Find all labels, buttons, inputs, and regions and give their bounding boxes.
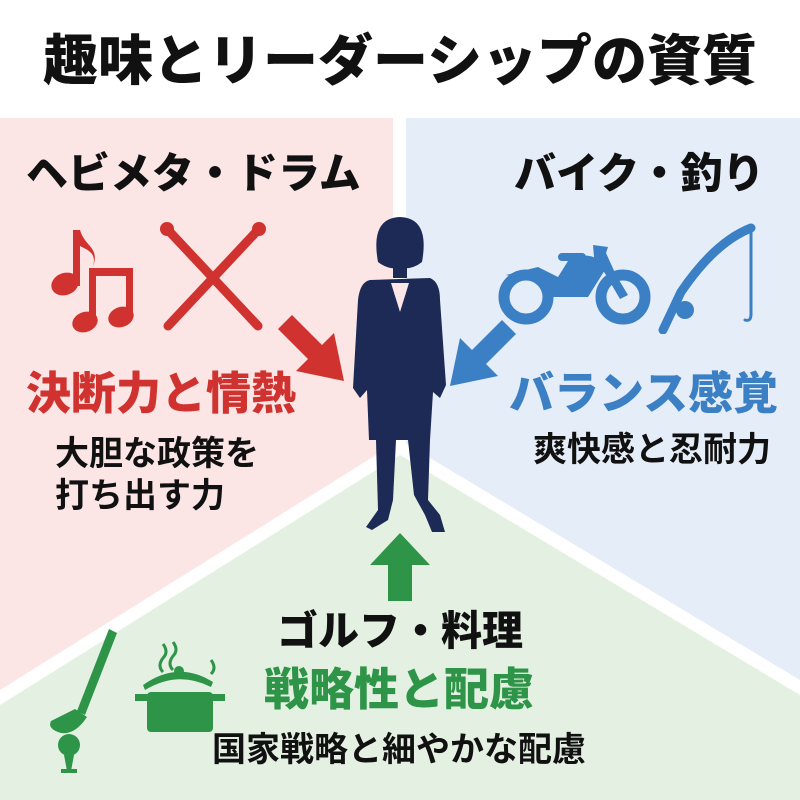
- subheading: strategy: 戦略性と配慮: [264, 664, 534, 715]
- icon: drumsticks: [160, 222, 266, 330]
- arrow: blue: [450, 320, 516, 386]
- arrow: red: [278, 315, 344, 381]
- icon: pot: [135, 641, 225, 732]
- arrow: green up: [370, 533, 430, 601]
- text: exhilaration and patience: 爽快感と忍耐力: [533, 431, 771, 469]
- icon: fishing rod: [658, 224, 756, 334]
- text: bold policy: [55, 435, 259, 515]
- text: national strategy: 国家戦略と細やかな配慮: [212, 731, 586, 769]
- icon: motorcycle: [498, 245, 650, 324]
- text: bold policy: 大胆な政策を: [55, 435, 259, 473]
- icon: music note: [51, 230, 134, 332]
- text: bold policy: 打ち出す力: [55, 477, 225, 515]
- figure: woman silhouette: [353, 217, 446, 532]
- icon: golf club: [50, 629, 117, 773]
- heading: golf cooking: ゴルフ・料理: [277, 608, 523, 654]
- heading: heavy metal drums: ヘビメタ・ドラム: [26, 150, 361, 197]
- subheading: decisiveness: 決断力と情熱: [26, 368, 296, 419]
- subheading: balance: バランス感覚: [509, 368, 778, 419]
- title: 趣味とリーダーシップの資質: [43, 30, 757, 92]
- heading: bike fishing: バイク・釣り: [514, 150, 764, 197]
